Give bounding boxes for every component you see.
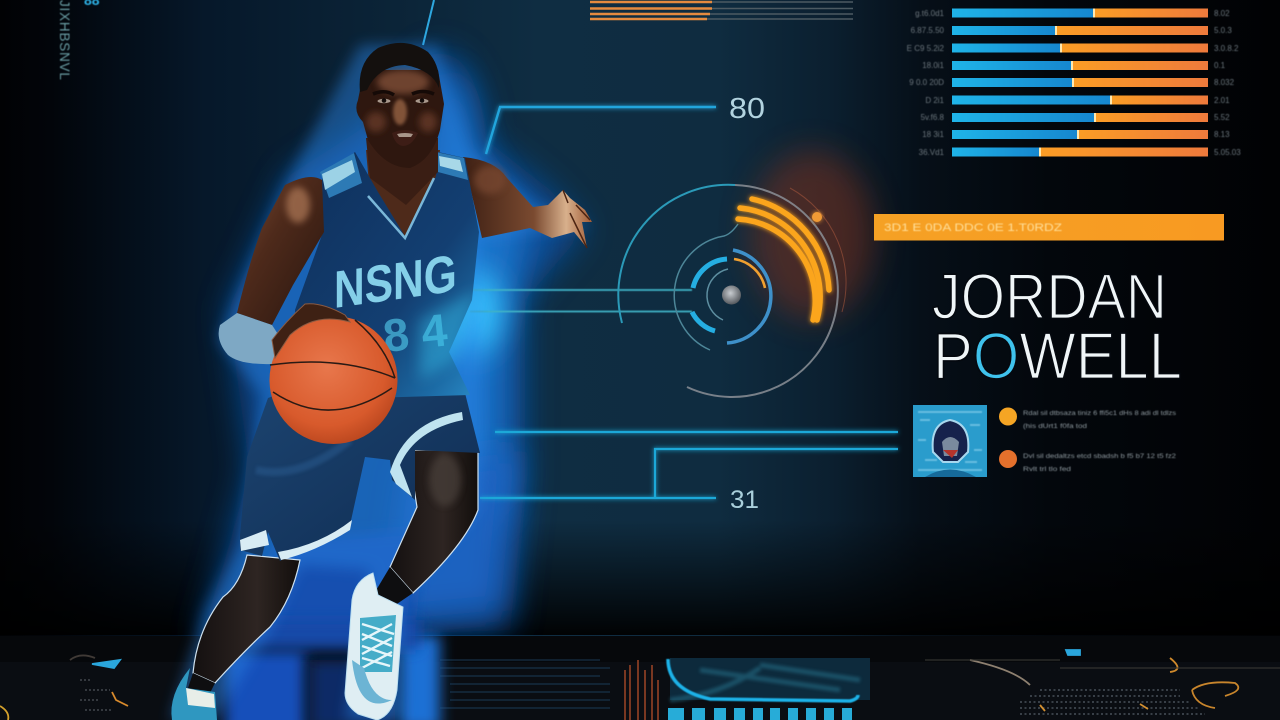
connector lines: [470, 290, 692, 312]
orange banner: 3D1 E 0DA DDC 0E 1.T0RDZ: [884, 222, 1062, 234]
right bar labels: 2.01: [1214, 96, 1230, 105]
shoulder stripes: [320, 153, 362, 198]
left bar labels: g.t6.0d1: [915, 9, 945, 18]
jersey lettering: NSNG: [334, 245, 457, 320]
left bar labels: 36.Vd1: [919, 148, 945, 157]
left bar labels: [907, 9, 945, 157]
legend text one: (his dUrt1 f0fa tod: [1023, 423, 1087, 430]
rotated side label: JIXHBSNVL: [57, 0, 72, 81]
legend text two: Rvlt trl tlo fed: [1023, 466, 1071, 473]
hand on ball: [272, 304, 350, 358]
floor circuitry right: [925, 650, 1280, 714]
left bar labels: 18.0i1: [922, 61, 945, 70]
right bar labels: 5.05.03: [1214, 148, 1241, 157]
left bar labels: 5v.f6.8: [921, 113, 945, 122]
legend text one: [1023, 410, 1177, 430]
left bar labels: 9 0.0 20D: [909, 78, 944, 87]
inner blue ring: [727, 250, 771, 343]
eyes: [373, 92, 434, 95]
right bar labels: 8.032: [1214, 78, 1235, 87]
centre knob: [722, 286, 741, 304]
legend text two: [1023, 453, 1176, 473]
player name: POWELL: [933, 318, 1182, 392]
neck: [366, 138, 438, 205]
middle ring: [674, 224, 738, 350]
torso skin: [366, 150, 440, 240]
orange banner: [874, 214, 1224, 240]
right bar labels: 0.1: [1214, 61, 1226, 70]
left bar labels: D 2i1: [925, 96, 945, 105]
legend text one: Rdal sil dtbsaza tiniz 6 ffi5c1 dHs 8 adi dl tdlzs: [1023, 410, 1177, 417]
blue glow behind player: [200, 50, 585, 640]
right bar labels: 3.0.8.2: [1214, 44, 1239, 53]
shorts: [240, 385, 480, 561]
mouth: [392, 130, 418, 146]
legend text two: Dvl sil dedaltzs etcd sbadsh b f5 b7 12 t5 fz2: [1023, 453, 1176, 460]
basketball: [270, 316, 398, 444]
inner orange arc: [734, 259, 765, 288]
trailing leg: [188, 555, 300, 697]
top stripe chart: [590, 2, 853, 19]
legend dot orange: [999, 408, 1017, 426]
floor circuitry left: [0, 655, 128, 720]
floor orange stripes: [625, 660, 658, 720]
radial gauge: [470, 150, 874, 397]
near arm: [219, 177, 324, 364]
right bar labels: [1214, 9, 1241, 157]
far arm and hand: [463, 157, 592, 248]
bar rows: [952, 8, 1208, 156]
right bar labels: 8.13: [1214, 130, 1230, 139]
left bar labels: E C9 5.2i2: [907, 44, 945, 53]
lower connector lines and 31 callout: [480, 432, 898, 514]
callout: 80: [486, 93, 765, 154]
outer orange arcs: [738, 199, 829, 320]
stat bars: [907, 8, 1241, 157]
floor blue reflection: [225, 620, 610, 720]
orange dot: [812, 212, 822, 222]
trailing shoe: [171, 668, 217, 720]
right bar labels: 5.52: [1214, 113, 1230, 122]
jersey: [295, 150, 479, 400]
legend dot red-orange: [999, 450, 1017, 468]
near shoe: [345, 573, 403, 720]
connector to top: [423, 0, 434, 45]
jersey number: 8 4: [381, 304, 450, 362]
player name: [932, 260, 1182, 392]
wrist sleeve: [219, 313, 285, 364]
player: [170, 43, 592, 720]
callout: 80: 80: [729, 93, 765, 125]
legend items: [999, 408, 1177, 473]
near leg: [375, 450, 478, 610]
floor screen: [668, 658, 870, 720]
head: [356, 43, 444, 168]
right bar labels: 8.02: [1214, 9, 1230, 18]
outer ring: [618, 185, 735, 323]
floor panel: [0, 620, 1280, 720]
left bar labels: 18 3i1: [922, 130, 945, 139]
team logo: [913, 405, 987, 477]
cyan arcs: [693, 259, 727, 288]
right bar labels: 5.0.3: [1214, 26, 1232, 35]
lower connector lines and 31 callout: 31: [730, 486, 759, 514]
rim glow: [170, 45, 592, 720]
player name: JORDAN: [932, 260, 1167, 332]
left bar labels: 6.87.5.50: [911, 26, 945, 35]
